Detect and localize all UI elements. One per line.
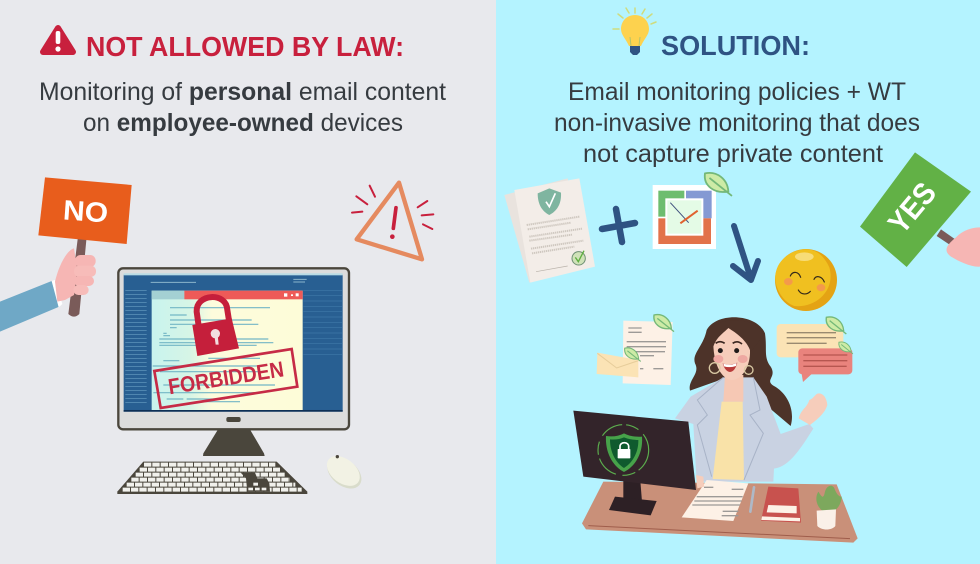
text: solution description: non-invasive monitoring that does	[554, 109, 920, 137]
keyboard	[117, 462, 307, 494]
face	[713, 327, 750, 380]
text: solution description	[554, 78, 920, 168]
heading: not allowed by law: NOT ALLOWED BY LAW:	[86, 31, 404, 62]
potted plant	[816, 486, 842, 529]
red book	[761, 487, 801, 523]
monitor stand	[203, 428, 265, 456]
arrow: down to result	[733, 226, 758, 280]
desk paper and pen	[682, 475, 754, 521]
sign pole	[937, 229, 980, 265]
icon: light bulb	[613, 8, 656, 55]
text: solution description: not capture private content	[583, 140, 883, 168]
text: restriction description	[39, 78, 446, 137]
monitor body	[118, 268, 349, 429]
text: restriction description: on employee-owned devices	[83, 109, 403, 137]
illustration: woman at desk	[573, 315, 858, 543]
forbidden stamp: FORBIDDEN	[166, 356, 285, 399]
document text lines	[153, 308, 275, 402]
icon: WT logo	[653, 173, 732, 249]
text: solution description: Email monitoring policies + WT	[568, 78, 906, 106]
raised hand	[799, 393, 827, 425]
icon: green security shield	[598, 425, 649, 475]
forbidden stamp	[154, 349, 297, 408]
NO sign board	[38, 177, 132, 244]
hand	[55, 248, 77, 302]
icon: plus sign	[602, 209, 635, 242]
illustration: computer with forbidden screen	[118, 268, 349, 456]
application window	[152, 291, 303, 410]
icon: red warning triangle	[43, 28, 73, 52]
icon: smiling emoji	[775, 249, 837, 311]
hair	[690, 317, 792, 426]
NO sign text: NO	[62, 194, 109, 229]
arm sleeve	[0, 281, 59, 332]
heading: solution: SOLUTION:	[661, 30, 810, 61]
panel: not allowed by law	[0, 0, 496, 564]
sign pole	[68, 237, 87, 317]
hand	[946, 227, 980, 267]
desktop monitor	[573, 411, 696, 515]
speech bubbles	[777, 317, 853, 382]
desk	[582, 482, 858, 543]
screen	[124, 275, 343, 412]
text: restriction description: Monitoring of personal email content	[39, 78, 446, 106]
body and jacket	[675, 377, 813, 482]
floating document and envelope	[597, 315, 674, 385]
YES sign text: YES	[882, 176, 943, 240]
icon: policy documents	[504, 178, 595, 283]
panel: solution	[496, 0, 980, 564]
padlock	[192, 297, 239, 356]
icon: orange warning triangle with rays	[352, 183, 433, 259]
illustration: hand holding YES sign	[860, 152, 980, 267]
mouse	[321, 450, 367, 495]
illustration: hand holding NO sign	[0, 177, 132, 332]
YES sign board	[860, 152, 971, 267]
